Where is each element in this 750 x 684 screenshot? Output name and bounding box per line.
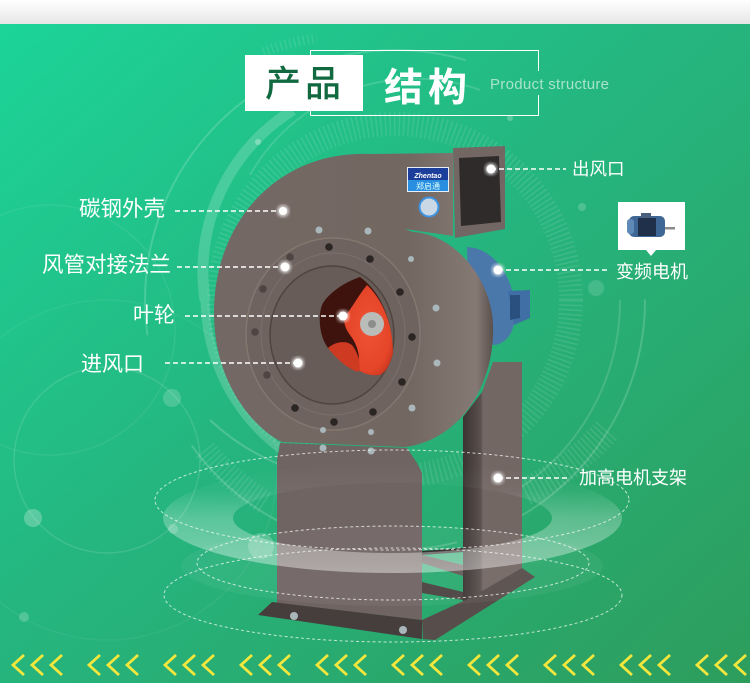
impeller [320,277,393,375]
title [245,50,609,116]
nameplate: Zhentao [413,173,442,180]
front stand [258,443,422,639]
housing bolts [316,226,440,435]
label: flange [42,253,291,277]
outlet flange [453,146,505,238]
label: motor support: 加高电机支架 [579,468,687,488]
background tech circles [0,38,645,640]
nameplate [407,167,449,192]
label: outlet: 出风口 [572,159,624,179]
bolts on the stand [290,444,407,634]
translucent rings [155,450,629,642]
yellow chevrons [13,655,746,675]
motor behind fan [467,247,530,345]
label: shell [79,197,289,221]
fan housing [214,146,505,447]
label: motor support [492,468,687,488]
flange holes [251,243,416,426]
motor photo card [618,202,685,256]
label: inlet [81,353,304,376]
icon: motor [627,213,675,237]
title english: Product structure [490,76,609,93]
top white band [0,0,750,24]
label: motor: 变频电机 [616,262,688,282]
label: impeller: 叶轮 [133,304,175,327]
dashed orbits [155,450,629,642]
title frame [310,50,538,116]
label: motor [492,262,688,282]
label: impeller [133,304,349,327]
label: outlet [485,159,624,179]
label: shell: 碳钢外壳 [79,197,165,221]
title box [245,55,363,111]
label: flange: 风管对接法兰 [42,253,171,277]
outlet opening [459,156,501,226]
title dark part: 产品 [265,63,345,104]
inlet flange ring [246,238,420,430]
inlet opening [270,266,394,404]
title white part: 结构 [384,67,472,110]
round badge [420,198,438,216]
nameplate: 郑启通 [416,181,440,191]
rear motor support [422,362,535,640]
label: inlet: 进风口 [81,353,144,376]
